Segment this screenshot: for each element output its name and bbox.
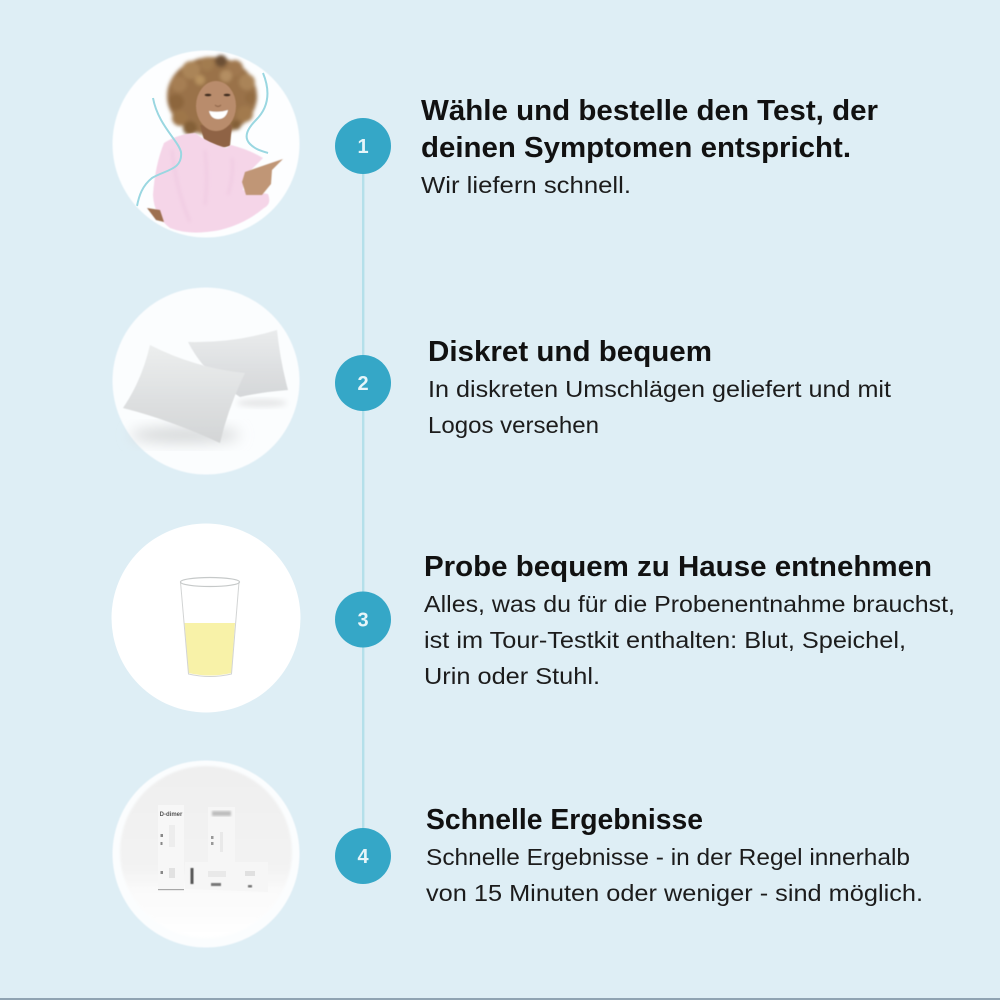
number badge 2 bbox=[335, 355, 391, 411]
step 1 text: deinen Symptomen entspricht. bbox=[421, 132, 851, 164]
image: smiling woman in pink sweater bbox=[112, 50, 300, 238]
image: two white pillows bbox=[112, 288, 300, 474]
image: glass with yellow liquid bbox=[112, 524, 300, 712]
number badge 2: 2 bbox=[357, 373, 369, 395]
step 3 text bbox=[424, 551, 955, 689]
step 4 text: Schnelle Ergebnisse bbox=[426, 804, 703, 836]
crossed hand left bbox=[147, 208, 164, 222]
step 1 text bbox=[421, 95, 878, 198]
bottom edge line bbox=[0, 998, 1000, 1000]
step 4 bbox=[112, 760, 923, 948]
hand pointing bbox=[242, 159, 283, 195]
step 2 text: Logos versehen bbox=[428, 412, 599, 438]
number badge 4 bbox=[335, 828, 391, 884]
front pillow bbox=[123, 345, 245, 443]
number badge 1: 1 bbox=[357, 136, 369, 158]
step 4 text bbox=[426, 804, 923, 906]
number badge 4: 4 bbox=[357, 846, 369, 868]
number badge 3 bbox=[335, 592, 391, 648]
step 4 text: von 15 Minuten oder weniger - sind möglich. bbox=[426, 880, 923, 906]
image: rapid test kits bbox=[112, 760, 300, 948]
number badge 3: 3 bbox=[357, 610, 369, 632]
step 3 bbox=[112, 524, 955, 712]
neck and face bbox=[196, 81, 236, 148]
step 1 text: Wir liefern schnell. bbox=[421, 172, 631, 198]
wave right bbox=[247, 73, 268, 153]
curly hair bbox=[167, 55, 257, 135]
wave left bbox=[137, 98, 181, 206]
number badge 1 bbox=[335, 118, 391, 174]
step 2 text: In diskreten Umschlägen geliefert und mit bbox=[428, 376, 891, 402]
step 1 text: Wähle und bestelle den Test, der bbox=[421, 95, 878, 127]
step 2 bbox=[112, 288, 891, 474]
step 3 text: ist im Tour-Testkit enthalten: Blut, Speichel, bbox=[424, 627, 906, 653]
test card D-dimer bbox=[158, 805, 184, 890]
timeline connector bbox=[362, 146, 364, 856]
step 4 text: Schnelle Ergebnisse - in der Regel innerhalb bbox=[426, 844, 910, 870]
step 3 text: Alles, was du für die Probenentnahme brauchst, bbox=[424, 591, 955, 617]
step 3 text: Probe bequem zu Hause entnehmen bbox=[424, 551, 932, 583]
liquid bbox=[184, 623, 235, 676]
test card upright bbox=[208, 807, 235, 863]
step 2 text bbox=[428, 336, 891, 438]
test card D-dimer: D-dimer bbox=[160, 812, 183, 818]
step 2 text: Diskret und bequem bbox=[428, 336, 712, 368]
back pillow bbox=[188, 330, 288, 397]
step 1 bbox=[112, 50, 878, 238]
glass outline bbox=[180, 582, 239, 676]
test card horizontal bbox=[185, 862, 268, 892]
sweater bbox=[153, 133, 269, 233]
step 3 text: Urin oder Stuhl. bbox=[424, 663, 600, 689]
